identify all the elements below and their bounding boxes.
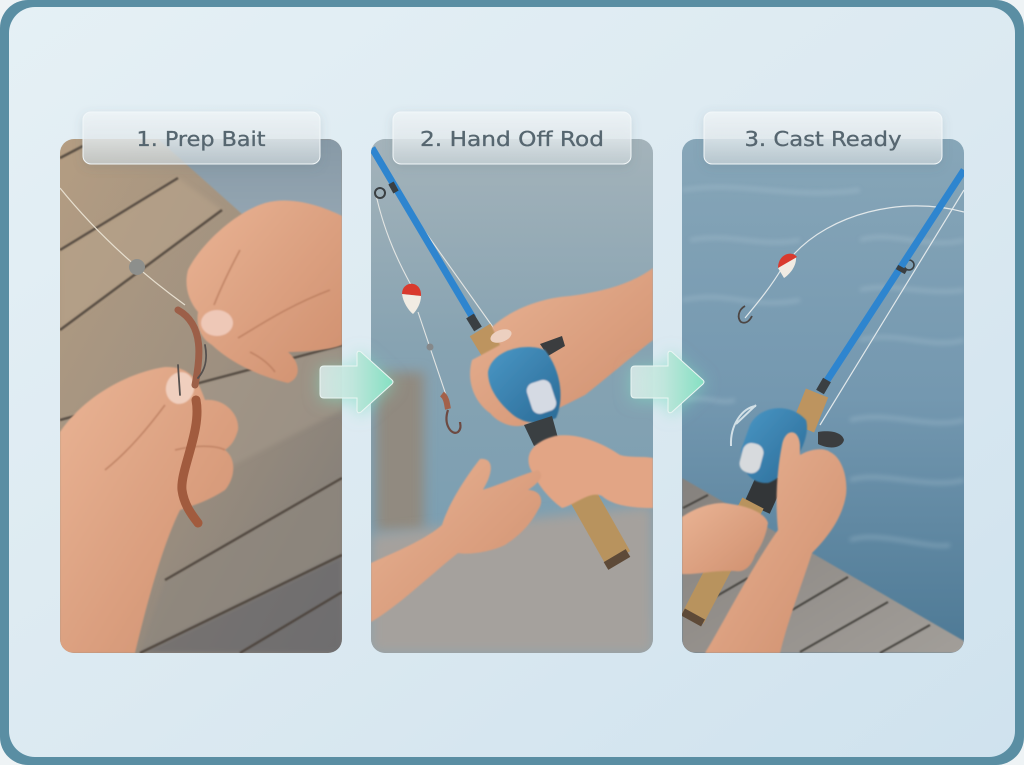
motion arrow [731, 405, 756, 446]
reel [737, 408, 807, 483]
casting arm and hand [705, 432, 846, 653]
lower hand [60, 367, 238, 653]
adult hand [470, 268, 653, 426]
panel: step 2 hand off rod photo [371, 139, 653, 653]
child reaching hand [371, 459, 541, 622]
reel handle [818, 431, 844, 447]
water background [158, 139, 342, 300]
label: step 3 [704, 112, 942, 164]
plank tones [107, 182, 342, 653]
deck plank gaps [60, 146, 342, 653]
child hand gripping [528, 435, 653, 508]
fishing line [60, 188, 185, 305]
panel: step 1 prep bait photo [60, 139, 342, 653]
deck corner [682, 478, 964, 653]
hand on grip [682, 503, 768, 574]
label: step 2 [393, 112, 631, 164]
arrow: step 2 to step 3 [631, 351, 704, 413]
upper hand [186, 201, 342, 383]
reel handle [540, 336, 565, 356]
fishing line and bobber [739, 190, 964, 425]
reel [488, 347, 561, 422]
sinker [129, 259, 145, 275]
label: step 1: 1. Prep Bait [136, 127, 266, 151]
label: step 3: 3. Cast Ready [744, 127, 902, 151]
fishing rod [372, 148, 502, 366]
water ripples [682, 187, 964, 546]
blurred dock post [376, 372, 424, 532]
panel: step 3 cast ready photo [682, 139, 964, 653]
label: step 2: 2. Hand Off Rod [420, 127, 604, 151]
label: step 1 [83, 112, 320, 164]
worm and hook [178, 310, 206, 523]
lower rod grip [524, 416, 628, 566]
arrow: step 1 to step 2 [320, 351, 393, 413]
fishing line and bobber [376, 185, 495, 433]
blurred deck [371, 505, 653, 653]
fishing rod [683, 170, 964, 623]
